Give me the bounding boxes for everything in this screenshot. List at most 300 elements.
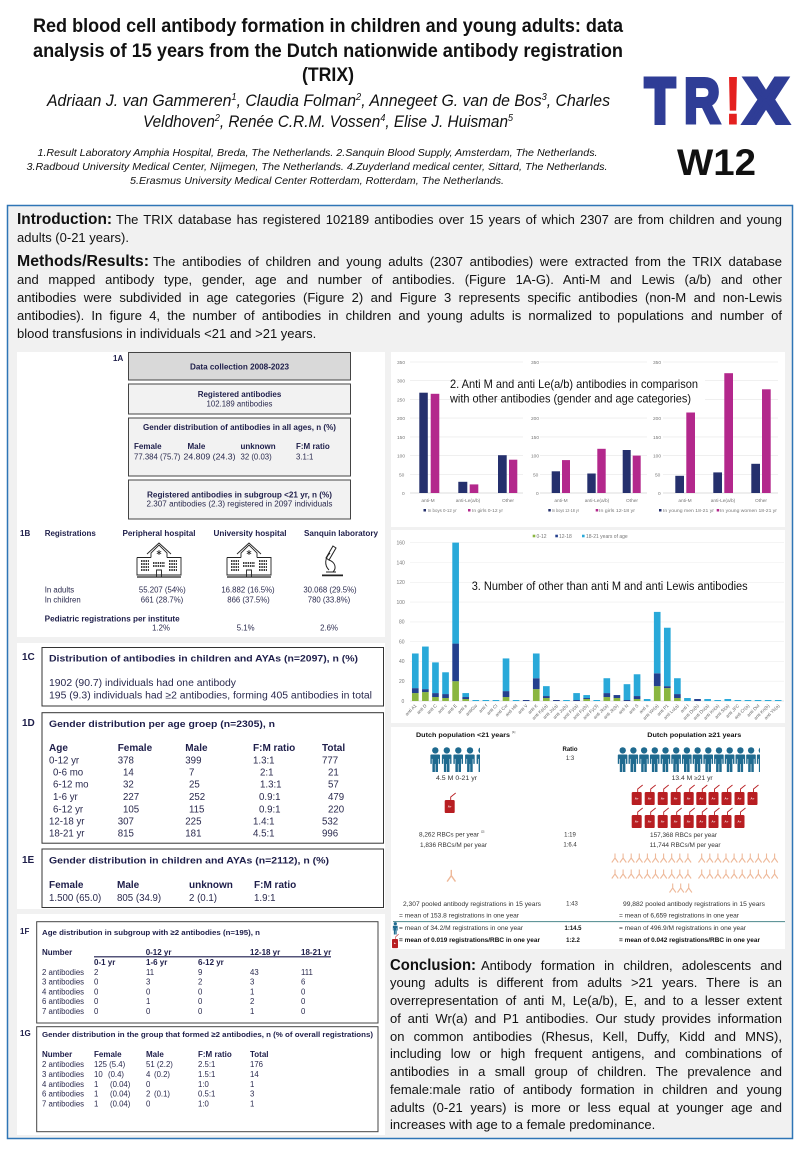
- conclusion text: on common antibodies (Rhesus, Kell, Duffy, Kidd and MNS),: [390, 1028, 782, 1044]
- 1D gender per age group table: 6-12 mo: [53, 780, 89, 791]
- category labels: anti-Le(a/b): [456, 498, 481, 504]
- 1B registrations per institute: 2.6%: [320, 624, 338, 633]
- 1G gender in group with multiple antibodies: 3 antibodies: [42, 1070, 84, 1079]
- y axis labels: 100: [531, 454, 539, 460]
- y axis labels: 50: [399, 472, 405, 478]
- 1A flow chart: Female: [134, 442, 162, 451]
- 1G gender in group with multiple antibodies: 2.5:1: [198, 1060, 215, 1069]
- y axis labels: 20: [399, 679, 405, 685]
- transfusion labels: [2]: [481, 830, 485, 834]
- legend: [533, 534, 628, 540]
- 1B registrations per institute: 661 (28.7%): [141, 595, 184, 604]
- methods and results text: antibodies were subdivided in age categories (Figure 2) and Figure 3 represents specific antibodies (non-M and non-Lewis: [17, 290, 782, 304]
- 1B registrations per institute: 16.882 (16.5%): [221, 586, 275, 595]
- 1F age distribution table: 0: [301, 1007, 306, 1016]
- icon: small bag key: [392, 934, 399, 948]
- authors: Adriaan J. van Gammeren: [47, 91, 245, 110]
- 1F age distribution table: 1: [250, 1007, 254, 1016]
- 1F age distribution table: 0: [198, 997, 203, 1006]
- conclusion text: young adults is different from adults >21 years. There is an: [390, 975, 782, 990]
- 1A flow chart: F:M ratio: [296, 442, 330, 451]
- x axis labels: anti JFC: [725, 703, 741, 719]
- registration figures: = mean of 496.9/M registrations in one year: [619, 926, 746, 932]
- legends: In boys 12-18 yr: [552, 508, 579, 514]
- x axis labels: anti C: [426, 703, 438, 715]
- 1F age distribution table: 4 antibodies: [42, 987, 84, 996]
- 1C distribution: 1C: [22, 652, 35, 663]
- 1B registrations per institute: Sanquin laboratory: [304, 529, 379, 538]
- 1E gender distribution: 1E: [22, 855, 35, 866]
- 1A flow chart: 32 (0.03): [240, 452, 272, 462]
- y axis labels: 150: [531, 435, 539, 441]
- 1E gender distribution: Male: [117, 880, 140, 891]
- 1F age distribution table: 18-21 yr: [301, 948, 331, 957]
- 1D gender per age group table: 6-12 yr: [53, 804, 84, 815]
- y axis labels: 80: [399, 620, 405, 626]
- 1B registrations per institute: University hospital: [214, 529, 286, 538]
- 1F age distribution table: Age distribution in subgroup with ≥2 antibodies (n=195), n: [42, 928, 260, 937]
- logo: TRIX: X: [744, 66, 788, 136]
- chart 3 heading: 3. Number of other than anti M and anti Lewis antibodies: [472, 581, 748, 593]
- y axis labels: [397, 360, 661, 497]
- registration figures: 2,307 pooled antibody registrations in 15 years: [403, 902, 541, 908]
- 1D gender per age group table: 57: [328, 780, 339, 791]
- icons: persons 21 and over: [618, 747, 766, 772]
- x axis labels: antiGw: [465, 703, 479, 717]
- conclusion text: increases with age to a female predominance.: [390, 1117, 655, 1132]
- bars: young men vs young women: [675, 373, 771, 493]
- logo: TRIX: T: [645, 66, 675, 136]
- registration figures: 1:2.2: [566, 938, 580, 944]
- authors: , Charles: [547, 91, 610, 110]
- authors: , Annegeet G. van de Bos: [361, 91, 542, 110]
- y axis labels: 250: [397, 397, 405, 403]
- 1D gender per age group table: 105: [123, 804, 139, 815]
- 1D gender per age group table: 0-6 mo: [53, 768, 83, 779]
- y axis labels: 150: [653, 435, 661, 441]
- panel: 1C 1D 1E: [17, 643, 385, 909]
- 1F age distribution table: 1F: [20, 927, 29, 936]
- y axis labels: 200: [653, 416, 661, 422]
- 1D gender per age group table: 18-21 yr: [49, 829, 85, 840]
- conclusion text: Antibody formation in children, adolescents and: [481, 958, 782, 972]
- main panel background: [8, 206, 792, 1138]
- 1G gender in group with multiple antibodies: 4: [146, 1070, 151, 1079]
- registration figures: [393, 902, 785, 944]
- 1C distribution: [22, 648, 384, 706]
- icons: persons under 21: [430, 747, 486, 772]
- 1A flow chart: Data collection 2008-2023: [190, 362, 290, 372]
- y axis labels: 0: [536, 491, 539, 497]
- 1G gender in group with multiple antibodies: 51 (2.2): [146, 1060, 173, 1069]
- x axis labels: anti Lu(a): [663, 703, 680, 720]
- 1D gender per age group table: 815: [118, 829, 134, 840]
- 1D gender per age group table: 14: [123, 768, 134, 779]
- 1F age distribution table: 0: [198, 1007, 203, 1016]
- x axis labels: anti Kp(a): [531, 703, 549, 721]
- 1F age distribution table: 111: [301, 968, 313, 977]
- 1F age distribution table: 11: [146, 968, 154, 977]
- 1F age distribution table: 1-6 yr: [146, 958, 167, 967]
- 1G gender in group with multiple antibodies: 10: [94, 1070, 103, 1079]
- 1G gender in group with multiple antibodies: (0.1): [154, 1090, 170, 1099]
- 1B registrations per institute: Registrations: [45, 529, 96, 538]
- x axis labels: anti D: [416, 703, 428, 715]
- 1G gender in group with multiple antibodies: 14: [250, 1070, 259, 1079]
- category labels: anti-M: [554, 498, 568, 504]
- 1A flow chart: Male: [188, 442, 206, 451]
- 1G gender in group with multiple antibodies: 0: [146, 1099, 151, 1108]
- 1B registrations per institute: 866 (37.5%): [227, 595, 270, 604]
- panel: figure 4 population comparison: [391, 727, 785, 949]
- 1F age distribution table: 3: [250, 978, 254, 987]
- x axis labels: anti Fy(b): [572, 703, 589, 720]
- column headings: 1:3: [566, 756, 575, 762]
- introduction text: adults (0-21 years).: [17, 230, 129, 244]
- transfusion labels: 1,836 RBCs/M per year: [420, 843, 487, 849]
- y axis labels: 100: [653, 454, 661, 460]
- 1F age distribution table: 9: [198, 968, 202, 977]
- 1F age distribution table: 6 antibodies: [42, 997, 84, 1006]
- 1E gender distribution: 2 (0.1): [189, 893, 217, 904]
- 1E gender distribution: 1.500 (65.0): [49, 893, 101, 904]
- x axis labels: anti A1: [404, 703, 418, 717]
- logo: TRIX: R: [684, 66, 720, 136]
- x axis labels: anti Kn(a): [702, 703, 720, 721]
- y axis labels: 0: [402, 699, 404, 705]
- transfusion labels: 1:19: [564, 832, 576, 838]
- category labels: Other: [626, 498, 638, 504]
- 1F age distribution table: 0: [94, 987, 99, 996]
- registration figures: = mean of 6,659 registrations in one year: [619, 914, 739, 920]
- 1G gender in group with multiple antibodies: 1.5:1: [198, 1070, 215, 1079]
- 1F age distribution table: 0: [94, 1007, 99, 1016]
- 1G gender in group with multiple antibodies: Gender distribution in the group that formed ≥2 antibodies, n (% of overall registrations): [42, 1030, 374, 1039]
- population labels: 4.5 M 0-21 yr: [436, 776, 477, 782]
- 1A flow chart: unknown: [240, 442, 276, 451]
- y axis labels: 100: [397, 454, 405, 460]
- affiliations: 5.Erasmus University Medical Center Rotterdam, Rotterdam, The Netherlands.: [130, 175, 504, 187]
- transfusion labels: 8,262 RBCs per year: [419, 832, 479, 838]
- 1G gender in group with multiple antibodies: 1: [94, 1080, 98, 1089]
- category labels: anti-M: [678, 498, 692, 504]
- y axis labels: 200: [531, 416, 539, 422]
- 1B registrations per institute: 5.1%: [237, 624, 255, 633]
- 1C distribution: Distribution of antibodies in children and AYAs (n=2097), n (%): [49, 654, 358, 665]
- x axis labels: anti K: [527, 703, 539, 715]
- 1D gender per age group table: 7: [189, 768, 194, 779]
- x axis labels: anti P1: [656, 703, 670, 717]
- chart 2 heading: 2. Anti M and anti Le(a/b) antibodies in comparison: [450, 377, 698, 391]
- x axis labels: anti Cl: [486, 703, 498, 716]
- poster number W12: W12: [677, 142, 756, 183]
- 1F age distribution table: 2: [198, 978, 202, 987]
- 1G gender in group with multiple antibodies: 125 (5.4): [94, 1060, 126, 1069]
- title: Red blood cell antibody formation in children and young adults: data: [33, 15, 623, 37]
- legends: In young men 18-21 yr: [663, 508, 714, 514]
- 1D gender per age group table: 181: [185, 829, 201, 840]
- registration figures: = mean of 0.042 registrations/RBC in one year: [619, 938, 761, 944]
- 1G gender in group with multiple antibodies: (0.04): [110, 1099, 131, 1108]
- 1B registrations per institute: [20, 529, 379, 633]
- 1F age distribution table: 3 antibodies: [42, 978, 84, 987]
- y axis labels: 120: [396, 580, 405, 586]
- 1G gender in group with multiple antibodies: 3: [250, 1090, 254, 1099]
- icon: microscope: [322, 546, 343, 576]
- x axis labels: anti Jk(b): [602, 703, 620, 720]
- 1E gender distribution: F:M ratio: [254, 880, 296, 891]
- 1F age distribution table: 7 antibodies: [42, 1007, 84, 1016]
- panel: chart 3 other antibodies: [391, 530, 785, 723]
- 1D gender per age group table: 227: [123, 792, 139, 803]
- affiliations: [26, 147, 608, 187]
- title: [33, 15, 623, 86]
- 1D gender per age group table: 25: [189, 780, 200, 791]
- 1D gender per age group table: 252: [189, 792, 205, 803]
- 1D gender per age group table: 307: [118, 816, 134, 827]
- 1D gender per age group table: 378: [118, 755, 134, 766]
- 1G gender in group with multiple antibodies: 1: [250, 1099, 254, 1108]
- 1D gender per age group table: 1.4:1: [253, 816, 275, 827]
- affiliations: 1.Result Laboratory Amphia Hospital, Breda, The Netherlands. 2.Sanquin Blood Supply, Amsterdam, The Netherlands.: [38, 147, 598, 159]
- methods and results text: The antibodies of children and young adults (2307 antibodies) were extracted from the TRIX database: [153, 254, 782, 268]
- 1D gender per age group table: 532: [322, 816, 338, 827]
- legends: In young women 18-21 yr: [720, 508, 777, 514]
- 1A flow chart: Registered antibodies in subgroup <21 yr, n (%): [147, 490, 332, 500]
- y axis labels: 350: [653, 360, 661, 366]
- icon: antibody under 21: [447, 870, 455, 882]
- gridlines: [410, 543, 784, 681]
- conclusion text: including low or high frequent antigens, and combinations of: [390, 1046, 782, 1061]
- x axis labels: anti Do(a): [692, 703, 710, 721]
- logo: TRIX: !: [726, 64, 740, 138]
- 1F age distribution table: 0: [94, 978, 99, 987]
- 1D gender per age group table: 996: [322, 829, 338, 840]
- x axis labels: anti Yk(a): [763, 703, 781, 721]
- registration figures: 99,882 pooled antibody registrations in 15 years: [623, 902, 765, 908]
- 1D gender per age group table: Total: [322, 743, 345, 754]
- column headings: Dutch population ≥21 years: [647, 732, 742, 739]
- 1C distribution: 195 (9.3) individuals had ≥2 antibodies, forming 405 antibodies in total: [49, 690, 372, 701]
- 1E gender distribution: 805 (34.9): [117, 893, 161, 904]
- 1D gender per age group table: [22, 713, 384, 843]
- 1F age distribution table: [20, 922, 378, 1023]
- 1A flow chart: 24.809 (24.3): [184, 452, 236, 462]
- 1B registrations per institute: 780 (33.8%): [308, 595, 351, 604]
- bars: boys 12-18 vs girls 12-18: [552, 449, 641, 493]
- methods and results text: and mapped antibody type, gender, age and number of antibodies. (Figure 1A-G). Anti-M and Lewis (a/b) and other: [17, 272, 782, 286]
- 1D gender per age group table: Gender distribution per age groep (n=2305), n: [49, 719, 275, 730]
- 1F age distribution table: 0-12 yr: [146, 948, 171, 957]
- 1B registrations per institute: Peripheral hospital: [122, 529, 196, 538]
- x axis labels: anti Hill: [504, 703, 519, 717]
- 1D gender per age group table: 4.5:1: [253, 829, 275, 840]
- legend: 12-18: [559, 534, 572, 540]
- registration figures: = mean of 153.8 registrations in one year: [399, 914, 519, 920]
- 1F age distribution table: 0: [301, 997, 306, 1006]
- legends: In boys 0-12 yr: [428, 508, 457, 514]
- authors: 2: [214, 113, 220, 124]
- registration figures: = mean of 0.019 registrations/RBC in one year: [399, 938, 541, 944]
- y axis labels: 150: [397, 435, 405, 441]
- y axis labels: 160: [396, 540, 405, 546]
- x axis labels: anti Cw: [494, 703, 509, 718]
- 1G gender in group with multiple antibodies: 1: [250, 1080, 254, 1089]
- 1F age distribution table: 1: [146, 997, 150, 1006]
- 1D gender per age group table: 1-6 yr: [53, 792, 79, 803]
- 1B registrations per institute: 1B: [20, 529, 30, 538]
- 1D gender per age group table: 0-12 yr: [49, 755, 80, 766]
- 1B registrations per institute: In adults: [45, 586, 74, 595]
- panel: chart 2 anti M and Lewis comparison: [391, 352, 785, 527]
- 1G gender in group with multiple antibodies: 2 antibodies: [42, 1060, 84, 1069]
- 1G gender in group with multiple antibodies: (0.04): [110, 1080, 131, 1089]
- x axis labels: anti s: [638, 703, 650, 714]
- 1A flow chart: [113, 352, 350, 519]
- column headings: [416, 730, 742, 762]
- 1F age distribution table: 0: [146, 987, 151, 996]
- 1A flow chart: 3.1:1: [296, 452, 313, 462]
- 1F age distribution table: 1: [250, 987, 254, 996]
- category labels: anti-Le(a/b): [711, 498, 736, 504]
- transfusion labels: 11,744 RBCs/M per year: [650, 843, 721, 849]
- 1G gender in group with multiple antibodies: 2: [146, 1090, 150, 1099]
- 1C distribution: 1902 (90.7) individuals had one antibody: [49, 678, 236, 689]
- y axis labels: 50: [533, 472, 539, 478]
- legends: In girls 0-12 yr: [472, 508, 503, 514]
- 1D gender per age group table: 1D: [22, 718, 35, 729]
- 1B registrations per institute: 1.2%: [152, 624, 170, 633]
- methods and results heading: Methods/Results:: [17, 253, 149, 270]
- x axis labels: anti c: [437, 703, 449, 714]
- x axis labels: anti S: [628, 703, 640, 715]
- 1G gender in group with multiple antibodies: 1G: [20, 1029, 31, 1038]
- 1F age distribution table: 0: [94, 997, 99, 1006]
- legends: In girls 12-18 yr: [599, 508, 635, 514]
- title: (TRIX): [302, 64, 354, 86]
- conclusion text: [390, 958, 782, 1132]
- authors: Veldhoven: [143, 112, 223, 131]
- x axis labels: anti Fy(3): [582, 703, 600, 720]
- x axis labels: anti Fy(a): [562, 703, 579, 720]
- x axis labels: anti f: [478, 703, 489, 714]
- x axis labels: anti E: [446, 703, 458, 715]
- introduction heading: Introduction:: [17, 211, 112, 228]
- methods and results text: blood transfusions in individuals <21 and >21 years.: [17, 326, 316, 340]
- 1D gender per age group table: Age: [49, 743, 68, 754]
- category labels: [421, 498, 767, 504]
- y axis labels: 60: [399, 640, 405, 646]
- 1D gender per age group table: 12-18 yr: [49, 816, 85, 827]
- 1F age distribution table: 2: [94, 968, 98, 977]
- methods and results text: antibodies). In figure 4, the number of antibodies in children and young adults is normalized to populations and number of: [17, 308, 782, 322]
- 1E gender distribution: Gender distribution in children and AYAs (n=2112), n (%): [49, 856, 329, 866]
- registration figures: 1:43: [566, 902, 578, 908]
- 1E gender distribution: unknown: [189, 880, 233, 891]
- icon: peripheral hospital: [137, 543, 181, 577]
- title: analysis of 15 years from the Dutch nationwide antibody registration: [33, 40, 623, 62]
- 1G gender in group with multiple antibodies: 6 antibodies: [42, 1090, 84, 1099]
- 1D gender per age group table: 115: [189, 804, 204, 815]
- 1F age distribution table: 2 antibodies: [42, 968, 84, 977]
- category labels: Other: [755, 498, 767, 504]
- 1F age distribution table: 0: [146, 1007, 151, 1016]
- panel: 1F 1G: [17, 914, 385, 1135]
- population labels: 13.4 M ≥21 yr: [672, 776, 713, 782]
- registration figures: = mean of 34.2/M registrations in one year: [399, 926, 523, 932]
- conclusion text: antibodies in a small group of children. The prevalence and: [390, 1064, 782, 1079]
- 1G gender in group with multiple antibodies: 7 antibodies: [42, 1099, 84, 1108]
- conclusion heading: Conclusion:: [390, 957, 476, 974]
- 1D gender per age group table: 399: [185, 755, 201, 766]
- 1G gender in group with multiple antibodies: [20, 1027, 378, 1132]
- 1F age distribution table: 0: [301, 987, 306, 996]
- 1F age distribution table: 6-12 yr: [198, 958, 224, 967]
- 1D gender per age group table: 0.9:1: [259, 804, 281, 815]
- logo: TRIX: [645, 64, 788, 138]
- x axis labels: anti N: [617, 703, 629, 715]
- 1B registrations per institute: In children: [45, 595, 81, 604]
- x axis labels: anti Do(b): [682, 703, 700, 721]
- 1A flow chart: 102.189 antibodies: [207, 400, 273, 408]
- authors: , Claudia Folman: [237, 91, 356, 110]
- y axis labels: [396, 540, 405, 705]
- stacked bars: [412, 543, 782, 701]
- 1F age distribution table: 2: [250, 997, 254, 1006]
- 1G gender in group with multiple antibodies: (0.4): [108, 1070, 124, 1079]
- x axis labels: anti e: [457, 703, 468, 715]
- 1A flow chart: 2.307 antibodies (2.3) registered in 2097 individuals: [146, 500, 333, 509]
- 1G gender in group with multiple antibodies: Female: [94, 1050, 122, 1059]
- 1F age distribution table: 43: [250, 968, 259, 977]
- gridlines: [410, 362, 778, 493]
- 1D gender per age group table: 32: [123, 780, 134, 791]
- 1G gender in group with multiple antibodies: 1:0: [198, 1080, 210, 1089]
- 1G gender in group with multiple antibodies: Male: [146, 1050, 164, 1059]
- 1A flow chart: 77.384 (75.7): [134, 452, 181, 462]
- 1F age distribution table: 3: [146, 978, 150, 987]
- x axis labels: anti I: [679, 703, 690, 714]
- introduction text: The TRIX database has registered 102189 antibodies over 15 years of which 2307 are from children and young: [116, 212, 782, 226]
- authors: [46, 91, 610, 131]
- x axis labels: [404, 703, 781, 721]
- legend: 18-21 years of age: [586, 534, 628, 540]
- icon: blood bag under 21: [445, 793, 456, 813]
- x axis labels: anti Wr(a): [642, 703, 660, 721]
- legend: 0-12: [536, 534, 547, 540]
- 1G gender in group with multiple antibodies: 0.5:1: [198, 1090, 215, 1099]
- transfusion labels: [419, 830, 721, 849]
- registration figures: 1:14.5: [564, 926, 582, 932]
- icon: university hospital: [227, 543, 271, 577]
- y axis labels: 300: [397, 379, 405, 385]
- 1D gender per age group table: 479: [328, 792, 344, 803]
- 1G gender in group with multiple antibodies: 4 antibodies: [42, 1080, 84, 1089]
- chart 2 heading: [449, 377, 698, 406]
- y axis labels: 140: [396, 560, 405, 566]
- 1D gender per age group table: 1.3:1: [253, 755, 275, 766]
- x axis labels: anti Dul: [746, 703, 760, 718]
- authors: , Renée C.R.M. Vossen: [220, 112, 380, 131]
- 1D gender per age group table: Male: [185, 743, 208, 754]
- y axis labels: 100: [396, 600, 405, 606]
- 1G gender in group with multiple antibodies: F:M ratio: [198, 1050, 232, 1059]
- column headings: Ratio: [562, 747, 578, 753]
- 1D gender per age group table: 225: [185, 816, 201, 827]
- 1G gender in group with multiple antibodies: (0.2): [154, 1070, 170, 1079]
- bars: boys 0-12 vs girls 0-12: [419, 393, 517, 493]
- introduction text: [17, 212, 782, 244]
